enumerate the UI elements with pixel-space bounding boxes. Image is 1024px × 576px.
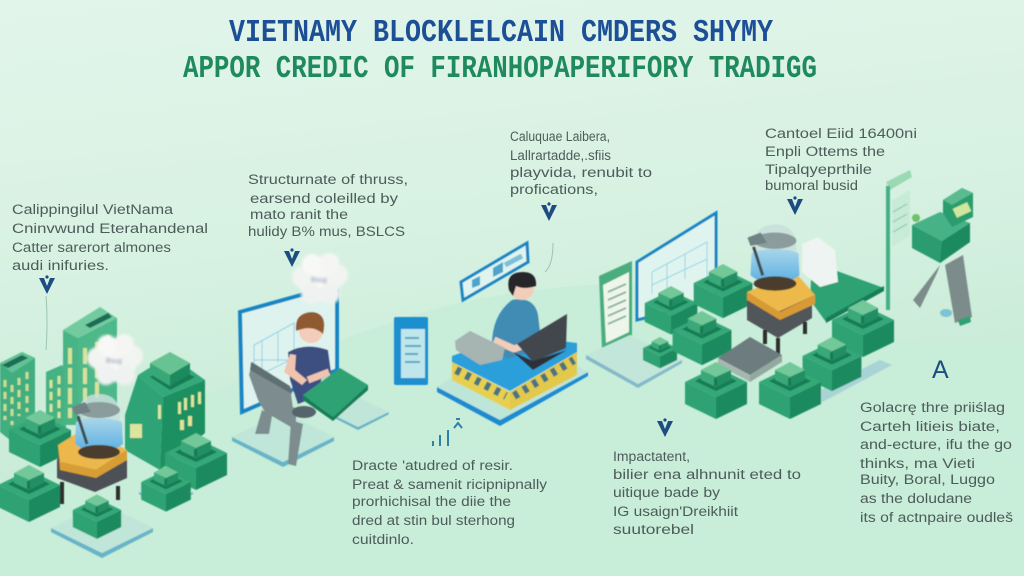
text block: calque [510,129,652,197]
pole with panel [886,170,912,310]
icon: chevron calque [541,202,557,272]
text block: left intro: audi inifuries. [12,258,109,273]
block left bottom [0,465,60,522]
icon: chevron left [39,275,55,350]
text block: golacre [860,400,1013,525]
text block: structure: hulidy B% mus, BSLCS [248,224,405,239]
grey flat box [718,337,782,382]
text block: golacre: and-ecture, ifu the go [860,437,1012,452]
text block: impact: uitique bade by [613,485,720,500]
text block: golacre: thinks, ma Vieti [860,456,975,471]
text block: left intro: Catter sarerort almones [12,240,171,255]
kettle stand [57,428,127,504]
text block: calque: Caluquae Laibera, [510,129,610,144]
tripod tower [912,188,973,326]
block right [165,433,227,490]
text block: control: bumoral busid [765,178,858,193]
platform with block [51,494,153,558]
text block: direct: prorhichisal the diie the [352,494,511,509]
icon: small chart [433,419,462,446]
phone [394,317,428,385]
title: VIETNAMY BLOCKLELCAIN CMDERS SHYMY [229,15,774,51]
callout [461,243,528,300]
tower 2 [63,307,117,430]
green plate [810,262,884,323]
icon: letter A: A [932,356,949,384]
text block: golacre: Carteh litieis biate, [860,419,1000,434]
table [303,368,368,421]
icon: chevron impact [657,418,673,437]
big block [125,352,205,470]
cloud [87,334,143,385]
text block: control: Tipalqyeprthile [765,162,872,177]
text block: structure: mato ranit the [250,207,348,222]
text block: impact: IG usaign'Dreikhiit [613,504,738,519]
text block: left intro: Cninvwund Eterahandenal [12,221,208,236]
text block: direct: Dracte 'atudred of resir. [352,458,513,473]
person at desk [437,243,588,426]
text block: golacre: Golacrę thre priiślag [860,400,1005,415]
text block: control: Cantoel Eiid 16400ni [765,126,917,141]
document panel [599,261,632,349]
text block: left intro: Calippingilul VietNama [12,202,174,217]
person [284,312,331,404]
screen [240,285,337,412]
icon: chevron structure [284,248,300,267]
laptop [513,314,567,370]
blocks [832,300,894,357]
kettle stand [747,272,815,354]
text block: direct [352,458,547,547]
text block: golacre: Buity, Boral, Luggo [860,472,995,487]
title [183,15,817,87]
strip [800,360,892,408]
text block: structure [248,172,408,239]
text block: impact: Impactatent, [613,449,690,464]
chair [249,362,316,466]
text block: direct: cuitdinlo. [352,532,414,547]
text block: structure: earsend coleilled by [250,191,398,206]
keyboard [455,331,505,365]
text block: control: Enpli Ottems the [765,144,885,159]
cloud [292,253,348,304]
text block: calque: playvida, renubit to [510,165,652,180]
text block: direct: dred at stin bul sterhong [352,513,515,528]
desk [452,335,577,410]
text block: impact [613,449,801,537]
text block: calque: profications, [510,182,598,197]
doc platform [586,335,682,388]
text block: golacre: its of actnpaire oudleš [860,510,1013,525]
title: APPOR CREDIC OF FIRANHOPAPERIFORY TRADIGG [183,51,817,87]
white machine [802,237,838,287]
screen [637,213,716,320]
person platform [232,412,334,467]
text block: impact: suutorebel [613,522,694,537]
text block: calque: Lallrartadde,.sfiis [510,148,611,163]
small block platform [139,466,193,512]
desk platform [437,335,588,426]
text block: structure: Structurnate of thruss, [248,172,408,187]
table platform [327,397,389,430]
icon: chevron control [787,196,803,215]
tower 1 [0,352,35,440]
left isometric city [0,307,227,558]
text block: golacre: as the doludane [860,491,972,506]
person [492,272,542,359]
tower 3 [46,365,66,435]
person at screen [232,253,389,467]
text block: impact: bilier ena alhnunit eted to [613,467,801,482]
text block: control [765,126,917,193]
text block: left intro [12,202,208,273]
right isometric cluster [586,170,973,419]
text block: direct: Preat & samenit ricipnipnally [352,477,547,492]
